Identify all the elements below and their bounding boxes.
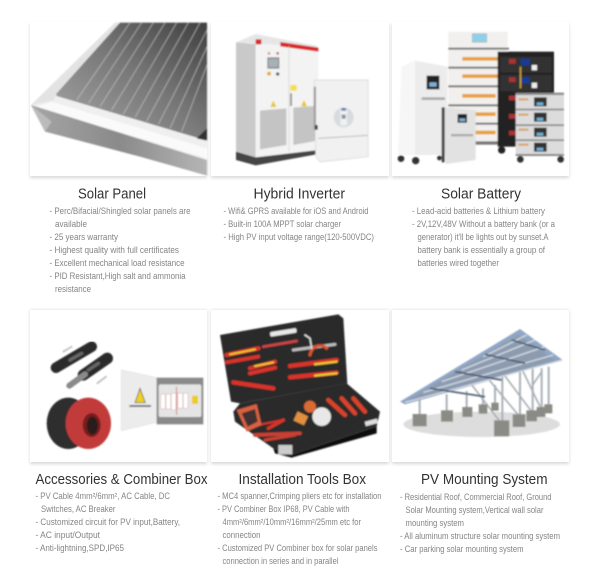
text block: battery features: - 2V,12V,48V Without a battery bank (or a xyxy=(412,219,555,229)
icon: connectors, cable rolls and combiner box xyxy=(47,347,203,449)
text block: tools features: - Customized PV Combiner box for solar panels xyxy=(218,543,378,553)
text block: inverter features: - Built-in 100A MPPT solar charger xyxy=(224,219,341,229)
text block: tools features: - PV Combiner Box IP68, PV Cable with xyxy=(218,504,350,514)
text block: solar panel features: available xyxy=(55,219,87,229)
panel: hybrid inverter image xyxy=(211,22,389,176)
text block: tools features: connection xyxy=(222,530,261,540)
heading: PV Mounting System: PV Mounting System xyxy=(421,471,548,488)
text block: solar panel features: - Highest quality with full certificates xyxy=(50,245,180,255)
text block: tools features: connection in series and in parallel xyxy=(222,556,339,566)
panel: solar battery image xyxy=(392,22,569,176)
heading: Solar Battery: Solar Battery xyxy=(441,186,521,202)
panel: PV mounting image xyxy=(392,310,569,462)
icon: open tool case xyxy=(220,314,380,458)
text block: tools features xyxy=(218,491,382,566)
text block: solar panel features: - 25 years warranty xyxy=(50,232,119,242)
icon: ground mounting structure xyxy=(400,329,563,437)
text block: battery features xyxy=(412,206,555,268)
text block: mounting features: mounting system xyxy=(406,518,464,528)
text block: solar panel features: - Perc/Bifacial/Shingled solar panels are xyxy=(50,206,191,216)
heading: Installation Tools Box: Installation Tools Box xyxy=(238,471,366,488)
icon: inverter cabinet and hybrid inverter xyxy=(236,34,368,165)
text block: accessories features xyxy=(36,491,180,553)
panel: tools box image xyxy=(211,310,389,462)
text block: accessories features: - Anti-lightning,SPD,IP65 xyxy=(36,543,124,553)
text block: mounting features xyxy=(400,492,560,554)
text block: solar panel features xyxy=(50,206,191,294)
text block: accessories features: Switches, AC Breaker xyxy=(41,504,116,514)
text block: mounting features: - Residential Roof, Commercial Roof, Ground xyxy=(400,492,552,502)
text block: solar panel features: resistance xyxy=(55,284,91,294)
text block: solar panel features: - PID Resistant,High salt and ammonia xyxy=(50,271,186,281)
text block: mounting features: Solar Mounting system,Vertical wall solar xyxy=(406,505,544,515)
heading: Hybrid Inverter: Hybrid Inverter xyxy=(254,186,345,202)
text block: solar panel features: - Excellent mechanical load resistance xyxy=(50,258,185,268)
text block: battery features: generator) it'll be lights out by sunset.A xyxy=(418,232,549,242)
icon: solar panel corner xyxy=(31,23,207,176)
text block: inverter features: - Wifi& GPRS available for iOS and Android xyxy=(224,206,369,216)
text block: battery features: battery bank is essentially a group of xyxy=(418,245,545,255)
card shadows xyxy=(30,24,569,464)
text block: battery features: - Lead-acid batteries & Lithium battery xyxy=(412,206,546,216)
panel: solar panel image xyxy=(30,22,207,176)
text block: accessories features: - Customized circuit for PV input,Battery, xyxy=(36,517,180,527)
text block: inverter features: - High PV input voltage range(120-500VDC) xyxy=(224,232,374,242)
text block: accessories features: - AC input/Output xyxy=(36,530,101,540)
text block: tools features: 4mm²/6mm²/10mm²/16mm²/25mm etc for xyxy=(222,517,361,527)
panel: accessories image xyxy=(30,310,207,462)
text block: tools features: - MC4 spanner,Crimping pliers etc for installation xyxy=(218,491,382,501)
text block: mounting features: - All aluminum structure solar mounting system xyxy=(400,531,560,541)
heading: Accessories & Combiner Box: Accessories & Combiner Box xyxy=(36,471,208,488)
text block: inverter features xyxy=(224,206,374,242)
heading: Solar Panel: Solar Panel xyxy=(78,186,146,202)
text block: battery features: batteries wired together xyxy=(418,258,499,268)
text block: mounting features: - Car parking solar mounting system xyxy=(400,544,524,554)
icon: battery stacks xyxy=(398,32,564,164)
text block: accessories features: - PV Cable 4mm²/6mm², AC Cable, DC xyxy=(36,491,171,501)
